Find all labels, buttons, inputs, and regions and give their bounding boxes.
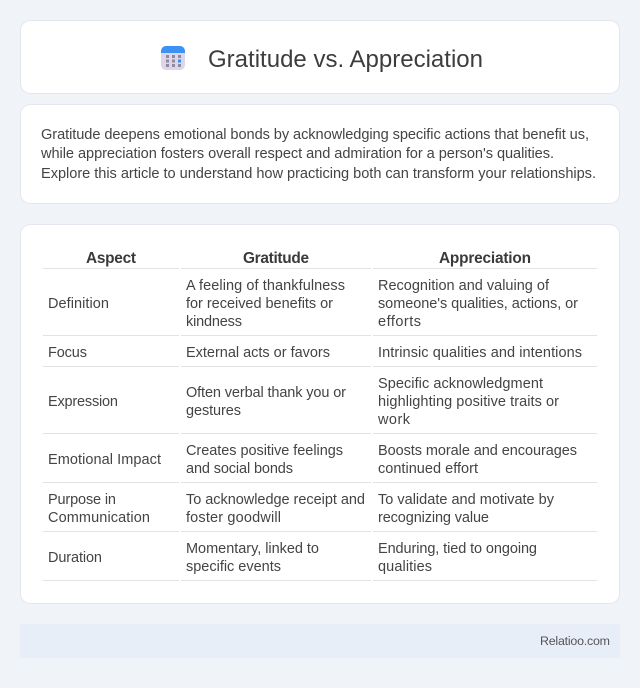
text block: introduction: Explore this article to understand how practicing both can transform your relationships. (41, 166, 596, 182)
row: expression: gestures (186, 403, 241, 419)
row: focus: Intrinsic qualities and intentions (378, 345, 582, 361)
panel: comparison table (20, 224, 620, 604)
row: expression: Often verbal thank you or (186, 385, 346, 401)
row: purpose in communication: recognizing value (378, 510, 489, 526)
row: expression: Specific acknowledgment (378, 376, 543, 392)
row: expression: highlighting positive traits or (378, 394, 559, 410)
row: purpose in communication: To validate and motivate by (378, 492, 555, 508)
footer credit: Relatioo.com (540, 634, 610, 648)
row: purpose in communication: Purpose in (48, 492, 116, 508)
row: expression: Expression (48, 394, 118, 410)
panel: introduction (20, 104, 620, 204)
row: purpose in communication (48, 492, 555, 526)
table header row: Gratitude (243, 250, 309, 267)
row: focus: Focus (48, 345, 87, 361)
table header row: Aspect (86, 250, 136, 267)
row: definition: someone's qualities, actions, or (378, 296, 578, 312)
row: focus (48, 345, 582, 361)
text block: introduction: while appreciation fosters overall respect and admiration for a person's qualities. (40, 146, 554, 162)
text block: introduction: Gratitude deepens emotional bonds by acknowledging specific actions that benefit us, (41, 127, 589, 143)
row: emotional impact: and social bonds (186, 461, 293, 477)
panel: title header (20, 20, 620, 94)
row: duration (48, 541, 537, 575)
table header row (86, 250, 531, 267)
row: definition: A feeling of thankfulness (186, 278, 345, 294)
row: definition: Recognition and valuing of (378, 278, 550, 294)
row: emotional impact: continued effort (378, 461, 478, 477)
row: definition (48, 278, 578, 330)
row: definition: for received benefits or (186, 296, 333, 312)
row: definition: kindness (186, 314, 242, 330)
row: emotional impact: Creates positive feelings (186, 443, 343, 459)
row: emotional impact: Boosts morale and encourages (378, 443, 577, 459)
text block: introduction (40, 127, 596, 182)
row: purpose in communication: Communication (48, 510, 150, 526)
row: duration: specific events (186, 559, 281, 575)
row: duration: qualities (378, 559, 432, 575)
row: expression: work (377, 412, 411, 428)
row: duration: Duration (48, 550, 102, 566)
row: emotional impact: Emotional Impact (48, 452, 161, 468)
row: definition: Definition (48, 296, 109, 312)
table header row: Appreciation (439, 250, 531, 267)
title: Gratitude vs. Appreciation (208, 46, 483, 73)
row: purpose in communication: To acknowledge receipt and (186, 492, 365, 508)
row: expression (48, 376, 559, 428)
row: duration: Momentary, linked to (186, 541, 319, 557)
row: purpose in communication: foster goodwill (186, 510, 281, 526)
table rules (43, 268, 597, 581)
row: duration: Enduring, tied to ongoing (378, 541, 537, 557)
row: emotional impact (48, 443, 577, 477)
row: focus: External acts or favors (186, 345, 330, 361)
icon: calendar (161, 46, 185, 70)
row: definition: efforts (378, 314, 421, 330)
footer bar (20, 624, 620, 658)
